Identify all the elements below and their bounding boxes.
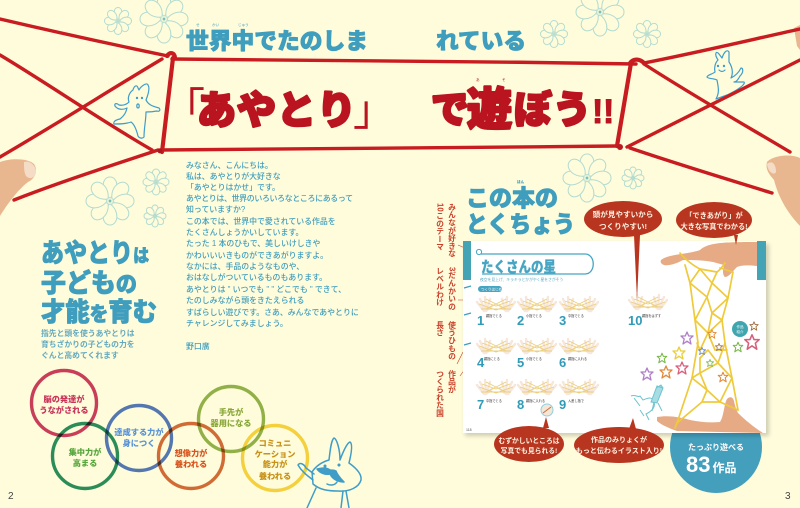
title line 1 — [186, 22, 526, 54]
finger: right bottom — [767, 155, 800, 226]
vertical annotation labels: 3だんかいの — [447, 267, 456, 310]
step 10: 親指をはずす — [642, 313, 661, 318]
finger nail: right — [767, 162, 776, 174]
intro text block: たのしみながら頭をきたえられる — [186, 295, 304, 305]
intro text block: たくさんしょうかいしています。 — [186, 227, 303, 237]
red string figure — [0, 19, 800, 200]
title line 2: あ — [476, 77, 480, 82]
title line 2: で — [431, 90, 469, 132]
intro text block: 野口廣 — [186, 341, 210, 351]
speech bubble: hands: 頭が見やすいから — [593, 209, 653, 219]
book page preview — [463, 241, 766, 433]
speech bubble: large photo — [676, 202, 752, 245]
ring labels: 養われる — [259, 471, 291, 481]
level markers — [464, 286, 471, 345]
heading: left section: 子どもの — [41, 268, 137, 298]
step 10: 10 — [628, 313, 642, 328]
flowers: decoration — [86, 0, 660, 227]
intro text block — [186, 161, 359, 351]
title line 2: あやとり — [197, 90, 356, 133]
heading: book features: この本の — [466, 185, 558, 211]
step 6 — [559, 339, 598, 370]
page number 3: 3 — [785, 491, 791, 502]
heading: book features — [466, 179, 575, 237]
speech bubble: difficult parts: 写真でも見られる! — [501, 446, 557, 455]
circle badge: 83 works: たっぷり遊べる — [688, 442, 744, 452]
ring labels: ケーション — [255, 450, 295, 459]
level tag — [478, 286, 502, 292]
icon: rabbit right — [707, 51, 744, 99]
step 5: 小指でとる — [526, 356, 542, 361]
book sub heading: 夜空を見上げ、キラキラとかがやく星をさがそう — [480, 277, 563, 282]
ring labels: 養われる — [175, 459, 207, 469]
annotation pointer lines — [457, 245, 465, 376]
step 7: 7 — [477, 397, 484, 412]
step 10 — [628, 295, 667, 328]
speech bubble: large photo: 「できあがり」が — [685, 211, 744, 220]
intro text block: この本では、世界中で愛されている作品を — [186, 216, 336, 226]
finger: left — [0, 159, 36, 216]
heading: left section: 才能を育む — [41, 297, 157, 327]
finger nail: left — [24, 162, 36, 178]
icon: rabbit with moustache — [298, 438, 361, 508]
step 1: 親指でとる — [486, 313, 502, 318]
vertical annotation labels: 作品が — [447, 369, 456, 393]
ring labels: コミュニ — [259, 439, 291, 448]
side tab left — [463, 241, 471, 280]
intro text block: チャレンジしてみましょう。 — [186, 318, 288, 328]
ring labels: 想像力が — [175, 448, 208, 458]
step 8 — [517, 380, 556, 412]
step 5: 5 — [517, 355, 524, 370]
step 2: 2 — [517, 313, 524, 328]
ring labels: 高まる — [73, 458, 97, 468]
heading: left section — [41, 238, 157, 327]
title line 2: そ — [502, 77, 506, 82]
heading: left section: あやとりは — [41, 238, 149, 268]
page preview shadow — [465, 244, 769, 436]
sub text: left section: ぐんと高めてくれます — [41, 350, 119, 360]
step 6: 6 — [559, 355, 566, 370]
book heading: たくさんの星 — [481, 259, 556, 276]
ring labels: 器用になる — [211, 419, 251, 428]
speech bubble: difficult parts: むずかしいところは — [498, 436, 560, 445]
rings — [32, 370, 308, 490]
intro text block: 私は、あやとりが大好きな — [186, 171, 281, 181]
title line 2: 遊 — [467, 84, 512, 135]
vertical annotation labels: みんなが好きな — [447, 203, 456, 258]
finger: right top — [794, 25, 800, 50]
page number: 118 — [466, 428, 472, 432]
step 8: 親指に入れる — [526, 398, 545, 403]
step 3: 中指でとる — [568, 313, 584, 318]
title line 1: れている — [436, 29, 526, 54]
title line 1: じゅう — [238, 22, 249, 27]
intro text block: おはなしがついているものもあります。 — [186, 272, 327, 282]
step 9: 9 — [559, 397, 566, 412]
title line 1: 世界中でたのしま — [186, 29, 368, 54]
step 9: 人差し指で — [568, 398, 584, 403]
circle badge: 83 works: 83作品 — [686, 452, 736, 477]
ring labels — [39, 394, 295, 481]
step 7: 中指でとる — [486, 398, 502, 403]
ring labels: 脳の発達が — [44, 394, 85, 404]
title line 2: 「 — [163, 85, 205, 132]
hand bottom — [657, 397, 763, 433]
sub text: left section: 指先と頭を使うあやとりは — [41, 328, 135, 338]
large yellow string figure — [675, 253, 738, 428]
intro text block: なかには、手品のようなものや、 — [186, 261, 304, 271]
speech bubble: hands: つくりやすい! — [599, 221, 647, 231]
ring labels: 能力が — [263, 459, 288, 469]
step 1: 1 — [477, 313, 484, 328]
speech bubble: illustrations — [574, 418, 664, 463]
title line 2: 」 — [353, 87, 395, 134]
title line 2 — [163, 77, 614, 135]
page number 2: 2 — [8, 491, 14, 502]
title line 1: かい — [212, 22, 220, 27]
heading: book features: とくちょう — [466, 211, 575, 237]
step 2: 小指でとる — [526, 313, 542, 318]
circle badge: 83 works — [670, 401, 762, 493]
step 2 — [517, 297, 556, 328]
speech bubble: difficult parts — [494, 417, 564, 462]
stars — [641, 322, 759, 382]
step 7 — [477, 380, 515, 412]
intro text block: みなさん、こんにちは。 — [186, 161, 273, 170]
heading: book features: ほん — [517, 179, 525, 184]
step 4: 親指にとる — [484, 356, 500, 361]
ring labels: 手先が — [219, 407, 244, 417]
sub text: left section — [41, 328, 135, 360]
step 9 — [559, 380, 598, 412]
speech bubble: large photo: 大きな写真でわかる! — [680, 222, 748, 231]
ring labels: 身につく — [123, 438, 155, 448]
icon: rabbit left — [114, 84, 160, 138]
vertical annotation labels: レベルわけ — [435, 267, 444, 307]
intro text block: あやとりは、世界のいろいろなところにあるって — [186, 193, 353, 203]
step 6: 親指に入れる — [568, 356, 587, 361]
ring labels: 達成する力が — [114, 427, 164, 437]
step 3 — [559, 297, 598, 328]
speech bubble: illustrations: 作品のみりょくが — [591, 435, 647, 444]
book heading — [476, 249, 593, 276]
side tab right — [757, 241, 766, 280]
title line 2: ぼう — [514, 90, 591, 132]
level tag: つくりはじめ — [481, 286, 502, 292]
vertical annotation labels: 10このテーマ — [435, 203, 444, 251]
teal badge: 作品 — [736, 324, 744, 329]
speech bubble: hands — [584, 201, 662, 300]
sub text: left section: 育ちざかりの子どもの力を — [41, 339, 135, 349]
title line 2: !! — [592, 93, 614, 131]
step 8: 8 — [517, 397, 524, 412]
ring labels: 集中力が — [69, 447, 102, 457]
step 4: 4 — [477, 355, 485, 370]
step 1 — [477, 297, 515, 328]
step 5 — [517, 339, 556, 370]
step 4 — [477, 339, 515, 370]
icon: telescope rabbit — [631, 385, 663, 420]
teal badge: 紹介 — [736, 329, 744, 334]
detail inset — [541, 404, 553, 416]
title line 1: せ — [196, 22, 200, 27]
intro text block: すばらしい遊びです。さあ、みんなであやとりに — [186, 307, 359, 317]
speech bubble: illustrations: もっと伝わるイラスト入り! — [576, 446, 662, 455]
intro text block: かわいいいきものができあがりますよ。 — [186, 250, 328, 260]
hand top — [661, 242, 757, 277]
intro text block: 知っていますか? — [186, 204, 246, 214]
vertical annotation labels: 長さ — [435, 321, 444, 337]
intro text block: あやとりは " いつでも " " どこでも " できて、 — [186, 284, 346, 294]
ring labels: うながされる — [39, 405, 89, 415]
vertical annotation labels — [435, 203, 456, 418]
teal badge — [732, 321, 748, 337]
vertical annotation labels: 使うひもの — [447, 320, 456, 360]
vertical annotation labels: つくられた国 — [435, 370, 444, 418]
intro text block: たった 1 本のひもで、美しいけしきや — [186, 238, 321, 248]
step 3: 3 — [559, 313, 566, 328]
intro text block: 「あやとりはかせ」です。 — [186, 183, 280, 192]
